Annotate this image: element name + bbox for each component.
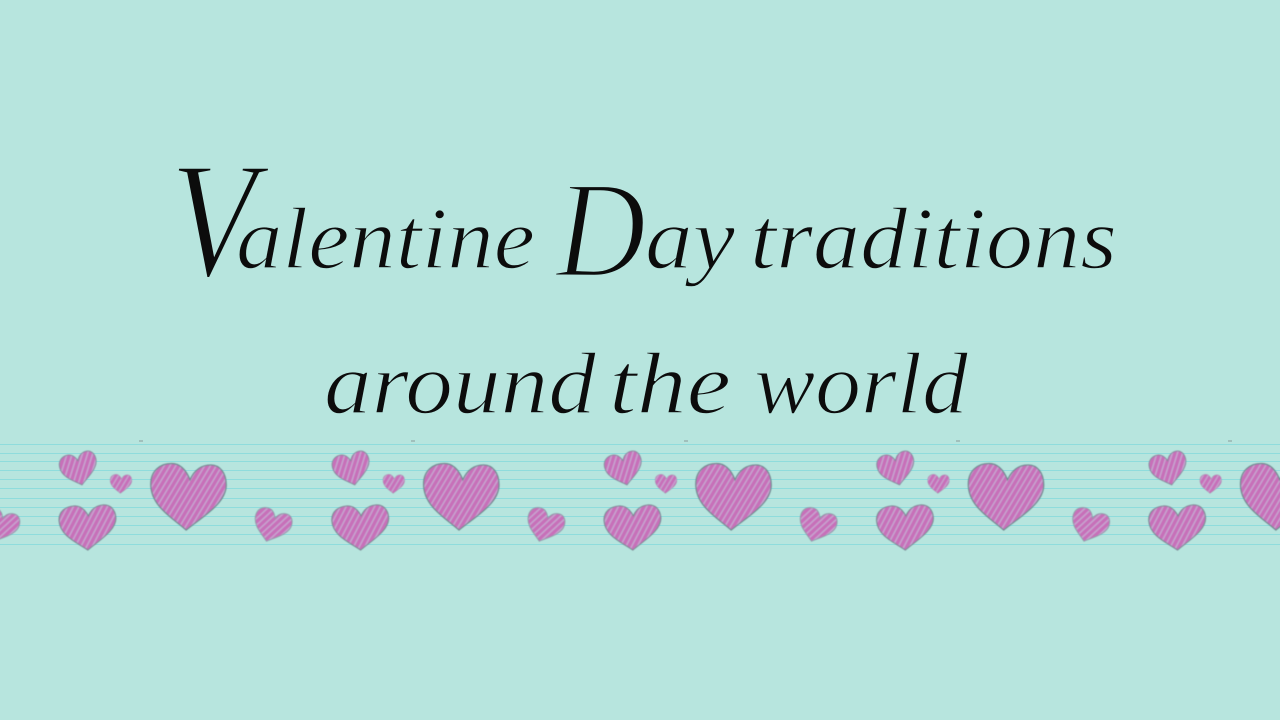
hearts group 0 — [0, 449, 22, 552]
title line 1: D — [554, 153, 646, 306]
title line 1: traditions — [750, 191, 1117, 288]
hearts group 4 — [875, 449, 1112, 552]
hearts group 2 — [330, 449, 567, 552]
title line 2: world — [754, 336, 969, 433]
title line 2: around — [324, 336, 597, 433]
title line 1: alentine — [236, 191, 535, 288]
hearts group 3 — [602, 449, 839, 552]
title line 1: V — [170, 128, 270, 312]
title line 2 — [324, 336, 969, 433]
hearts group 5 — [1147, 449, 1280, 552]
title line 2: the — [609, 336, 731, 433]
title — [170, 128, 1117, 433]
title line 1: ay — [645, 191, 736, 288]
hearts group 1 — [57, 449, 294, 552]
title line 1 — [170, 128, 1117, 312]
heart band — [0, 440, 1280, 552]
